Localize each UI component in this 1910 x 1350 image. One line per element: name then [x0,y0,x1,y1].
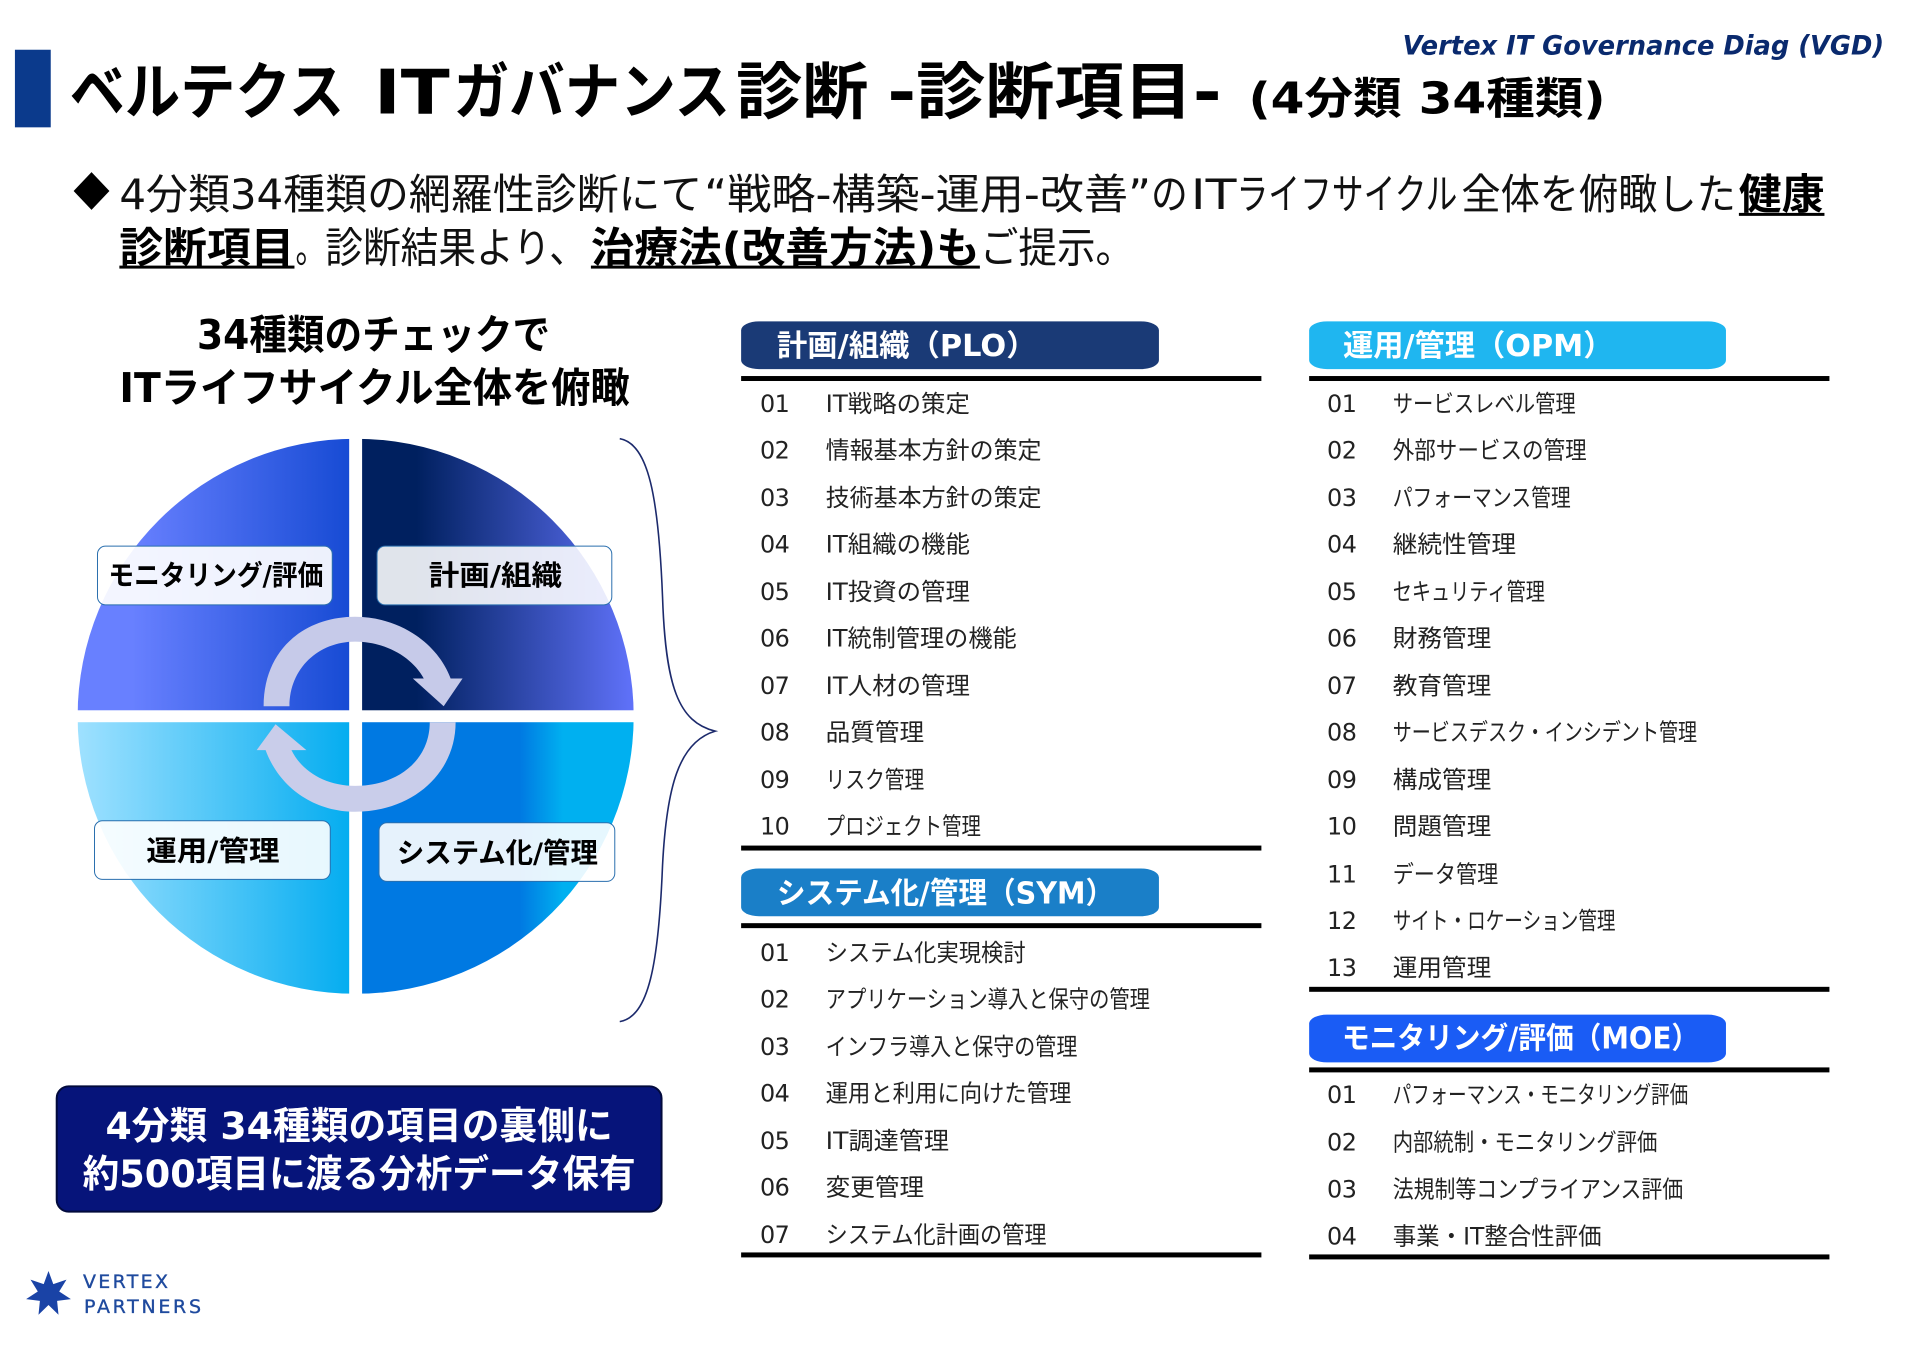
lead text: ご提示。 [980,224,1134,273]
label: operations: 運用/管理 [146,834,280,867]
row OPM 05: セキュリティ管理 [1393,578,1545,606]
logo [26,1271,201,1318]
product name tag: Vertex IT Governance Diag (VGD) [1403,31,1884,62]
row SYM 01: 01 [760,939,790,967]
row SYM 06 [760,1174,924,1202]
row OPM 04: 04 [1327,531,1357,559]
left panel heading: 34種類のチェックで [197,311,550,359]
row OPM 01 [1327,390,1576,418]
row OPM 02: 02 [1327,437,1357,465]
row MOE 01 [1327,1081,1688,1109]
row OPM 11: データ管理 [1393,860,1498,888]
row PLO 10: プロジェクト管理 [826,813,981,841]
row SYM 01: システム化実現検討 [826,939,1026,967]
row PLO 01: 01 [760,390,790,418]
row OPM 11: 11 [1327,860,1357,888]
row OPM 08 [1327,719,1697,747]
brace [620,439,715,1022]
label: system [379,823,615,881]
title: 診断 [736,56,868,128]
row OPM 07: 07 [1327,672,1357,700]
row MOE 04: 事業・IT整合性評価 [1393,1222,1602,1250]
callout: data analysis: 4分類 34種類の項目の裏側に [105,1104,613,1148]
row OPM 08: サービスデスク・インシデント管理 [1393,719,1697,747]
label: operations [95,821,330,879]
label: planning: 計画/組織 [429,559,562,592]
row OPM 06: 06 [1327,625,1357,653]
panel: PLO [741,321,1261,851]
row OPM 04: 継続性管理 [1393,531,1516,559]
lead text: の [1151,170,1188,219]
row OPM 12: 12 [1327,907,1357,935]
quadrant: system [362,722,634,994]
label: monitoring [97,546,332,605]
row PLO 03: 技術基本方針の策定 [826,484,1042,512]
row PLO 07: IT人材の管理 [826,672,970,700]
row OPM 11 [1327,860,1498,888]
row SYM 04: 04 [760,1080,790,1108]
title: ガバナンス [454,56,730,128]
left panel heading [119,311,630,412]
heading: OPM [1309,321,1726,369]
row SYM 03: 03 [760,1033,790,1061]
row MOE 02: 内部統制・モニタリング評価 [1393,1128,1657,1156]
label: monitoring: モニタリング/評価 [108,559,323,592]
arrow: lower cycle [257,722,456,812]
row OPM 01: 01 [1327,390,1357,418]
row PLO 09 [760,766,924,794]
row SYM 07: 07 [760,1221,790,1249]
quadrant: monitoring [78,439,349,710]
row PLO 03: 03 [760,484,790,512]
row OPM 02: 外部サービスの管理 [1393,437,1587,465]
row MOE 03: 法規制等コンプライアンス評価 [1393,1176,1683,1204]
row PLO 04 [760,531,970,559]
lead text: ライフサイクル [1237,170,1457,219]
row OPM 12: サイト・ロケーション管理 [1393,907,1616,935]
row PLO 08 [760,719,924,747]
row PLO 09: 09 [760,766,790,794]
title: -診断項目- [887,56,1222,128]
row PLO 05: 05 [760,578,790,606]
callout: data analysis [57,1086,662,1212]
row OPM 03: パフォーマンス管理 [1393,484,1571,512]
row PLO 02: 情報基本方針の策定 [826,437,1042,465]
lead text: 治療法(改善方法)も [591,224,980,273]
row MOE 01: 01 [1327,1081,1357,1109]
row SYM 06: 変更管理 [826,1174,924,1202]
row PLO 06: 06 [760,625,790,653]
row PLO 07: 07 [760,672,790,700]
row PLO 10 [760,813,981,841]
lead text [74,170,1824,273]
logo wordmark: PARTNERS [84,1296,201,1318]
row MOE 02: 02 [1327,1128,1357,1156]
row OPM 13: 13 [1327,954,1357,982]
row OPM 10: 10 [1327,813,1357,841]
left panel heading: ITライフサイクル全体を俯瞰 [119,364,630,412]
title: (4分類 34種類) [1248,73,1606,124]
row OPM 10 [1327,813,1491,841]
heading: MOE: モニタリング/評価（MOE） [1342,1022,1699,1057]
lead text: 。 [295,224,325,273]
arrow: upper cycle [264,617,463,706]
row PLO 08: 08 [760,719,790,747]
quadrant: planning [362,439,634,710]
icon: star [26,1271,71,1315]
row PLO 01: IT戦略の策定 [826,390,970,418]
row OPM 13 [1327,954,1491,982]
row PLO 08: 品質管理 [826,719,924,747]
row SYM 03: インフラ導入と保守の管理 [826,1033,1077,1061]
row OPM 12 [1327,907,1616,935]
row OPM 01: サービスレベル管理 [1393,390,1576,418]
heading: OPM: 運用/管理（OPM） [1343,329,1614,364]
panel: OPM [1309,321,1829,992]
label: planning [377,546,612,605]
quadrant: operations [78,722,349,994]
lead text: 全体を俯瞰した [1461,170,1736,219]
row OPM 06 [1327,625,1491,653]
row SYM 05: 05 [760,1127,790,1155]
row SYM 07: システム化計画の管理 [826,1221,1047,1249]
heading: PLO [741,321,1159,369]
row OPM 13: 運用管理 [1393,954,1491,982]
title [70,56,1606,128]
row OPM 06: 財務管理 [1393,625,1491,653]
row OPM 09: 09 [1327,766,1357,794]
row MOE 01: パフォーマンス・モニタリング評価 [1393,1081,1688,1109]
row PLO 09: リスク管理 [826,766,924,794]
lead text: 4分類34種類の網羅性診断にて [119,170,702,219]
lead text: 健康 [1739,170,1824,219]
row PLO 05 [760,578,970,606]
row PLO 06: IT統制管理の機能 [826,625,1017,653]
row PLO 10: 10 [760,813,790,841]
row MOE 04: 04 [1327,1222,1357,1250]
lifecycle circle diagram [78,439,634,994]
callout: data analysis: 約500項目に渡る分析データ保有 [83,1152,636,1196]
row SYM 05: IT調達管理 [826,1127,949,1155]
row OPM 10: 問題管理 [1393,813,1491,841]
row PLO 04: IT組織の機能 [826,531,970,559]
row SYM 02: アプリケーション導入と保守の管理 [826,986,1150,1014]
row OPM 07: 教育管理 [1393,672,1491,700]
row OPM 04 [1327,531,1516,559]
row OPM 09: 構成管理 [1393,766,1491,794]
row PLO 04: 04 [760,531,790,559]
heading: MOE [1309,1015,1726,1062]
row SYM 02: 02 [760,986,790,1014]
row SYM 06: 06 [760,1174,790,1202]
panel: SYM [741,868,1261,1257]
row PLO 01 [760,390,970,418]
title: ベルテクス [70,56,344,128]
row PLO 05: IT投資の管理 [826,578,970,606]
row OPM 02 [1327,437,1587,465]
heading: SYM [741,868,1159,916]
lead text: “戦略-構築-運用-改善” [704,170,1151,219]
row SYM 05 [760,1127,949,1155]
logo wordmark [83,1271,201,1318]
row MOE 03: 03 [1327,1176,1357,1204]
row OPM 05 [1327,578,1545,606]
heading: SYM: システム化/管理（SYM） [777,876,1114,911]
row OPM 05: 05 [1327,578,1357,606]
row OPM 03: 03 [1327,484,1357,512]
row OPM 08: 08 [1327,719,1357,747]
label: system: システム化/管理 [397,836,598,869]
lead text: 診断結果より、 [325,224,587,273]
heading: PLO: 計画/組織（PLO） [777,329,1037,364]
lead text: IT [1191,170,1237,219]
row OPM 03 [1327,484,1571,512]
lead text: 診断項目 [119,224,294,273]
row OPM 09 [1327,766,1491,794]
row SYM 04: 運用と利用に向けた管理 [826,1080,1072,1108]
logo wordmark: VERTEX [83,1271,168,1293]
panel: MOE [1309,1015,1829,1259]
row PLO 02: 02 [760,437,790,465]
row PLO 07 [760,672,970,700]
title: IT [374,56,450,128]
row OPM 07 [1327,672,1491,700]
header accent bar [15,50,51,127]
